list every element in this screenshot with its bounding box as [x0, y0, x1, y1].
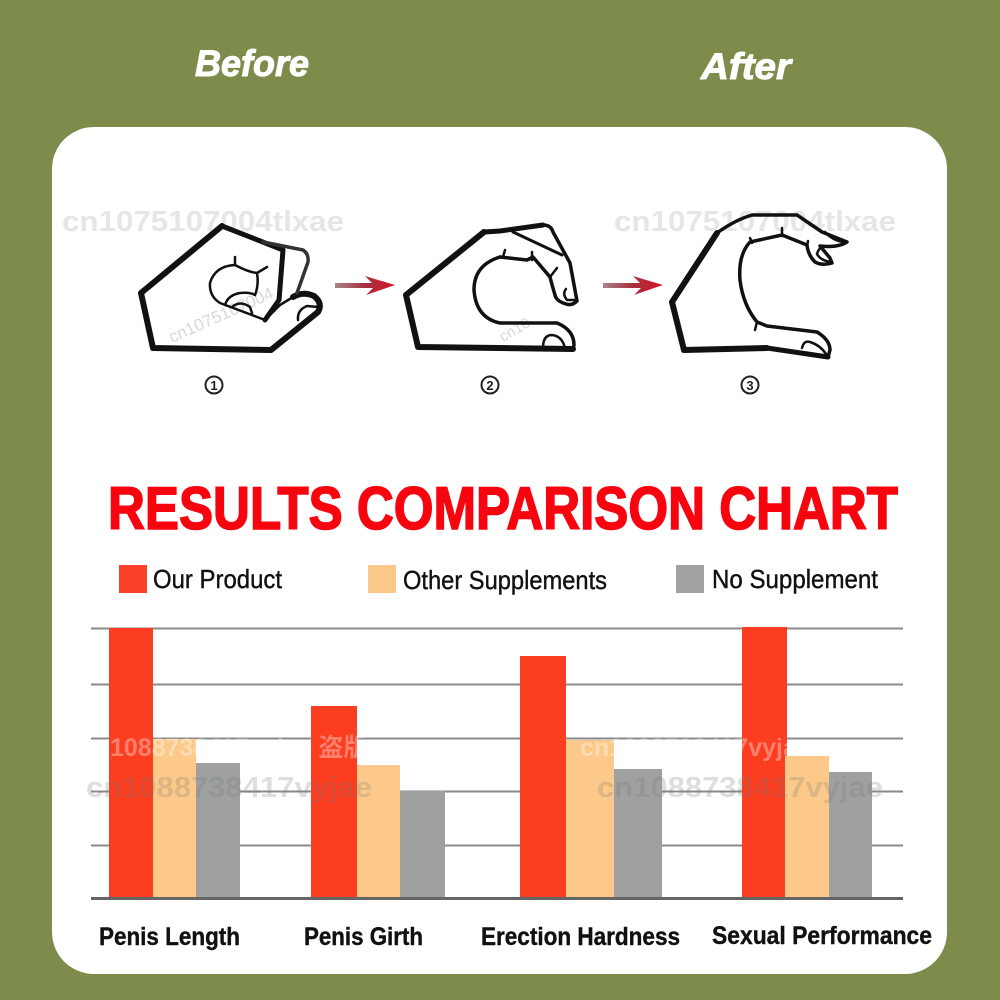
heading: After: After	[700, 46, 794, 87]
watermark: hand 2 diagonal: cn10	[496, 314, 533, 345]
watermark: chart upper right: cn1088738417vyjae	[580, 734, 811, 762]
step number 2	[482, 376, 498, 394]
legend item: Other Supplements: Other Supplements	[403, 565, 607, 595]
axis label: Penis Girth: Penis Girth	[304, 923, 423, 951]
axis label: Erection Hardness: Erection Hardness	[481, 923, 680, 951]
legend item: No Supplement: No Supplement	[712, 564, 879, 594]
bars: Penis Length	[109, 628, 240, 898]
legend item: Our Product: Our Product	[153, 564, 283, 594]
watermark: chart left: cn1088738417vyjae	[86, 772, 372, 804]
step number 3	[742, 376, 758, 394]
step number 1	[206, 376, 222, 394]
legend	[119, 564, 879, 595]
bars: Sexual Performance	[742, 627, 872, 898]
illustration: hand 1	[141, 226, 320, 350]
bars: Erection Hardness	[520, 656, 662, 898]
panel: white card	[52, 127, 947, 974]
illustration: hand 3	[672, 215, 847, 357]
step number 2: 2	[486, 378, 494, 393]
heading: Before: Before	[195, 43, 309, 84]
illustration: hand 2	[406, 225, 577, 349]
step number 1: 1	[210, 378, 218, 393]
watermark: chart right: cn1088738417vyjae	[597, 772, 883, 804]
step number 3: 3	[746, 378, 754, 393]
bar chart	[86, 627, 903, 898]
axis label: Penis Length: Penis Length	[99, 923, 240, 951]
arrow: step 1 to 2	[335, 276, 395, 295]
watermark: hand 1 diagonal: cn1075107004	[166, 284, 276, 347]
watermark: chart upper left: 1088738417vyjae 盗版	[110, 734, 369, 762]
bars: Penis Girth	[311, 706, 445, 898]
watermark: top right: cn1075107004tlxae	[614, 206, 896, 238]
arrow: step 2 to 3	[603, 276, 663, 295]
watermark: top left: cn1075107004tlxae	[62, 206, 344, 238]
axis label: Sexual Performance: Sexual Performance	[712, 922, 932, 950]
